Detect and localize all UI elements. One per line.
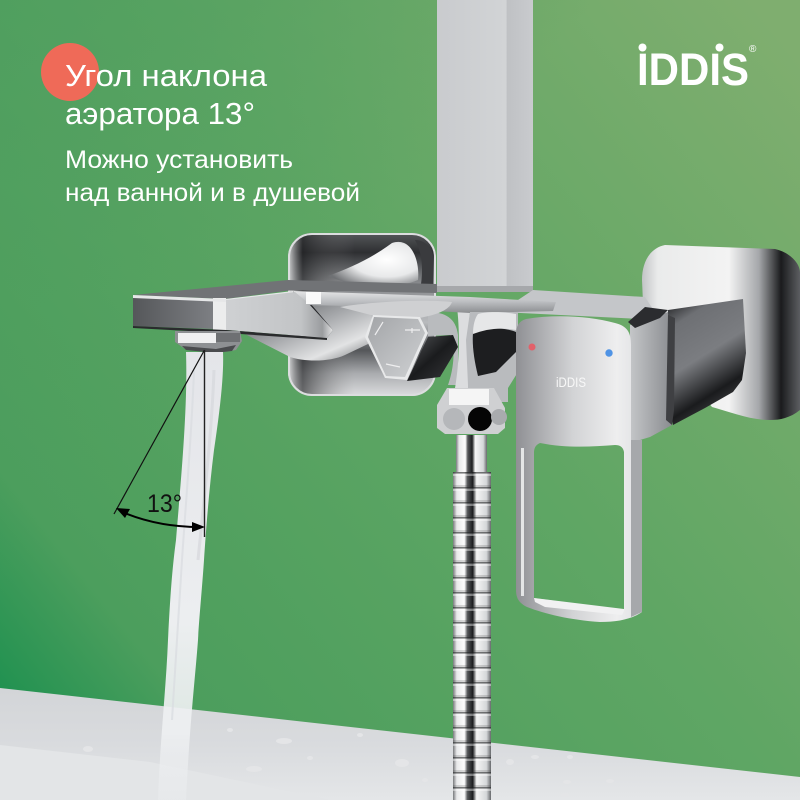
logo: IDDIS: IDDIS [637, 44, 749, 95]
spout top face [133, 280, 437, 299]
knob markings [375, 322, 420, 367]
angle label: 13° [147, 490, 182, 518]
spout underside [243, 303, 372, 361]
hexagonal diverter knob [365, 315, 458, 381]
lever cold/hot dots [528, 344, 613, 357]
title [65, 58, 268, 131]
logo: IDDIS: ® [749, 44, 757, 55]
red accent circle [41, 43, 99, 101]
lever logo: iDDIS [556, 374, 586, 390]
flexible shower hose [453, 435, 491, 800]
shower column [437, 0, 533, 292]
subtitle [65, 146, 360, 207]
bathtub rim with water droplets [0, 688, 800, 800]
chrome ring behind knob [428, 300, 472, 388]
subtitle: над ванной и в душевой [65, 179, 360, 207]
elbow connector [466, 312, 518, 402]
subtitle: Можно установить [65, 146, 293, 174]
hose nut [437, 388, 507, 434]
mixer bar behind handle [500, 290, 660, 320]
spout arm running to the right [293, 291, 556, 320]
mixer lever handle [516, 316, 642, 622]
angle diagram: 13 degrees [114, 350, 205, 537]
water stream [158, 352, 223, 800]
right wall plate [642, 245, 800, 420]
dark mixer cylinder [665, 299, 746, 425]
aerator [175, 331, 242, 353]
title: аэратора 13° [65, 96, 255, 131]
spout front face [133, 291, 333, 340]
mixer body side [628, 307, 675, 440]
left wall plate [288, 233, 436, 396]
title: Угол наклона [65, 58, 268, 93]
